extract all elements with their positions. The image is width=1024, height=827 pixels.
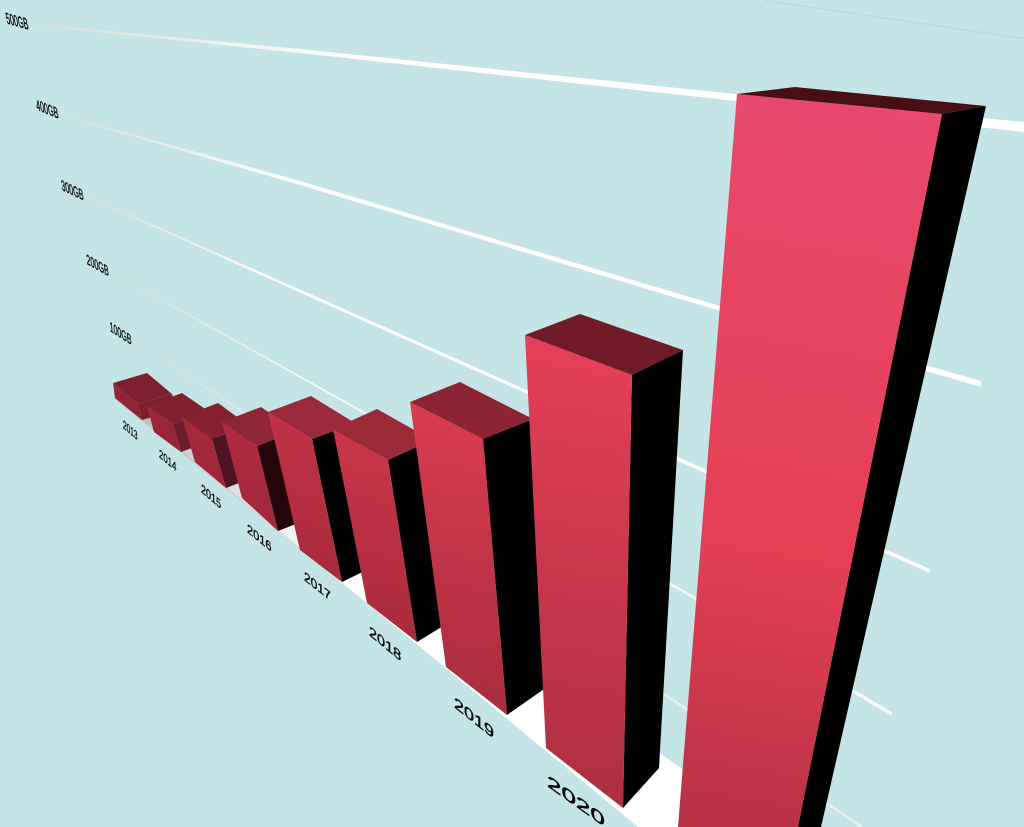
x-axis year labels: 2017 xyxy=(304,569,331,605)
x-axis year labels: 2015 xyxy=(201,481,221,512)
x-axis year labels: 2018 xyxy=(369,622,401,665)
bar: 2019 xyxy=(410,382,557,715)
x-axis year labels: 2019 xyxy=(454,694,494,743)
bar: 2013 xyxy=(113,373,176,420)
y-axis labels xyxy=(4,10,132,349)
floor platform xyxy=(115,395,700,827)
bar: 2020 xyxy=(525,314,683,808)
y-axis labels: 300GB xyxy=(60,176,85,204)
bar: 2018 xyxy=(333,409,461,642)
x-axis year labels: 2016 xyxy=(247,521,271,555)
bar: 2014 xyxy=(147,393,216,452)
x-axis year labels: 2014 xyxy=(159,447,176,475)
y-axis labels: 200GB xyxy=(86,250,110,280)
y-axis labels: 400GB xyxy=(35,96,60,122)
bar: 2015 xyxy=(182,403,262,488)
bar: 2016 xyxy=(222,407,316,531)
bar: 2017 xyxy=(268,396,385,582)
x-axis year labels xyxy=(123,419,605,827)
y-axis labels: 100GB xyxy=(109,320,132,349)
y-axis labels: 500GB xyxy=(4,10,30,34)
x-axis year labels: 2013 xyxy=(123,419,138,444)
bar: 2021 xyxy=(678,87,986,827)
